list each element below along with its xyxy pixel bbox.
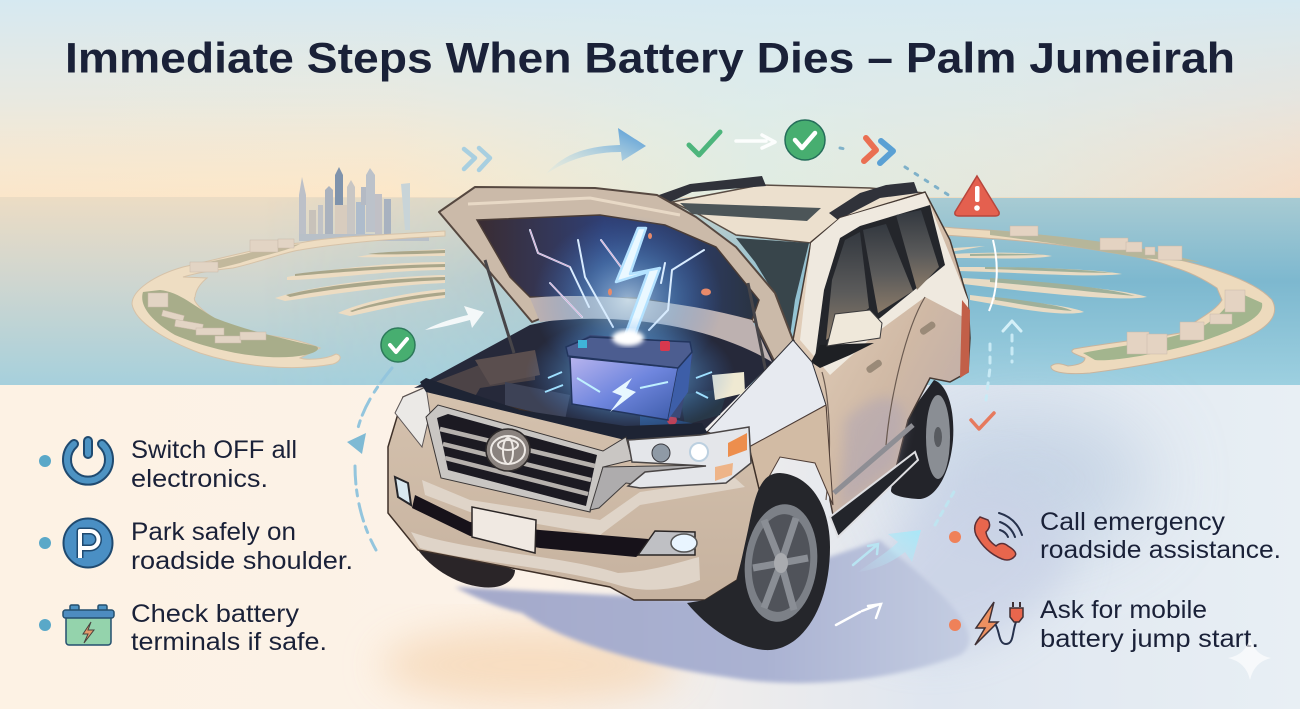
icon: red and blue chevrons [864, 138, 893, 163]
door seams [822, 297, 925, 500]
flow arrows and status icons above the car [464, 120, 999, 216]
side windows [815, 205, 945, 358]
palm island right [943, 226, 1275, 374]
arrow: blue curved [546, 128, 646, 174]
arrow: white [736, 135, 775, 148]
battery [525, 317, 735, 433]
chevron up [1003, 321, 1021, 331]
step: mobile jump start [949, 596, 1259, 653]
panel: steps on the left [39, 436, 353, 656]
hood struts [485, 260, 767, 377]
step: check battery: Check battery [131, 600, 300, 628]
skyline [299, 167, 429, 241]
step: switch off electronics: electronics. [131, 465, 268, 493]
fog light right [638, 531, 697, 555]
icon: green check circle [785, 120, 825, 160]
dotted trail [935, 490, 955, 525]
icon: phone [975, 513, 1022, 560]
icon: battery [63, 605, 114, 645]
windshield [736, 238, 809, 336]
step: call roadside assistance: roadside assistance. [1040, 536, 1281, 564]
side mirror [811, 310, 882, 368]
left front tire [418, 545, 515, 588]
fender white [707, 340, 826, 447]
right flow: arrows and check [836, 240, 1021, 625]
license plate [472, 507, 536, 553]
sparks [608, 233, 711, 296]
icon: green check [689, 132, 720, 155]
icon: green check circle [381, 328, 415, 362]
left palm buildings [148, 239, 294, 343]
dotted path [840, 148, 950, 196]
arrow: white [425, 306, 484, 330]
fender tan [749, 405, 833, 505]
cabin and body side [736, 192, 970, 537]
front wheel [687, 473, 830, 650]
left flow: check and dashed arc [347, 306, 484, 550]
tail light [960, 300, 970, 378]
title: Immediate Steps When Battery Dies – Palm Jumeirah [65, 34, 1235, 82]
lightning glow [533, 215, 723, 385]
icon: double chevron left [464, 148, 490, 170]
icon: warning triangle [955, 176, 999, 216]
icon: red check [971, 413, 994, 429]
step: mobile jump start: battery jump start. [1040, 625, 1259, 653]
icon: power [67, 441, 109, 481]
roof [659, 176, 925, 243]
background sky [0, 0, 1300, 198]
step: call roadside assistance [949, 508, 1281, 564]
white arc [989, 240, 997, 311]
background ground [0, 385, 1300, 709]
sparkle [1228, 637, 1271, 680]
car illustration [388, 176, 970, 650]
icon: parking [64, 518, 112, 568]
background sea [0, 197, 1300, 385]
running board [830, 452, 918, 537]
lightning bolts [530, 228, 704, 338]
left palm fronds [275, 249, 445, 316]
bumper highlights [411, 478, 745, 590]
left palm vegetation [142, 290, 318, 357]
right palm fronds [950, 246, 1147, 314]
arrow: cyan large [858, 530, 921, 572]
cowl band [420, 378, 708, 440]
step: mobile jump start: Ask for mobile [1040, 596, 1207, 624]
step: park safely: roadside shoulder. [131, 547, 353, 575]
lower bumper intake [412, 495, 660, 557]
arrow: white small [836, 604, 881, 625]
rear wheel [891, 380, 953, 499]
chrome center spear [590, 465, 709, 510]
door handles [865, 320, 937, 374]
step: park safely: Park safely on [131, 518, 296, 546]
right palm vegetation [1083, 290, 1262, 360]
step: switch off electronics: Switch OFF all [131, 436, 297, 464]
palm island left [132, 231, 445, 368]
upper door highlight [800, 193, 969, 375]
open hood [439, 187, 800, 385]
lower door shading [840, 397, 905, 510]
fog light left [395, 477, 411, 505]
dotted trails [986, 335, 1012, 400]
shadow under the car [455, 470, 1072, 683]
step: switch off electronics [39, 436, 297, 493]
arrowhead [347, 433, 366, 454]
arrow: cyan small [853, 544, 878, 565]
right palm buildings [1010, 226, 1245, 354]
step: check battery [39, 600, 327, 656]
left headlight [395, 387, 430, 447]
front fascia [388, 387, 760, 600]
grille [426, 405, 632, 512]
icon: bolt and plug [975, 602, 1023, 645]
engine bay [414, 310, 795, 437]
step: call roadside assistance: Call emergency [1040, 508, 1226, 536]
dashed arc [355, 368, 392, 550]
toyota logo [486, 429, 530, 471]
step: park safely [39, 518, 353, 575]
right headlight [628, 427, 751, 488]
step: check battery: terminals if safe. [131, 628, 327, 656]
panel: steps on the right [949, 508, 1281, 653]
